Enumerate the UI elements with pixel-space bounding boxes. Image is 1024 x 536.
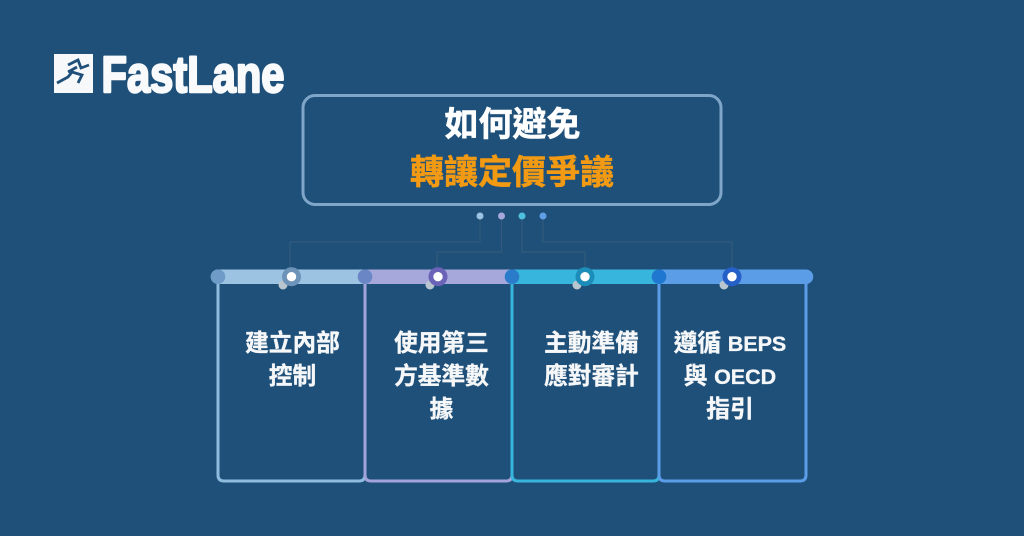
timeline bar bbox=[211, 270, 813, 284]
icon: running figure bbox=[54, 54, 93, 93]
logo: FastLane bbox=[54, 46, 284, 103]
card 2 text: 使用第三 bbox=[394, 330, 489, 357]
card 4 text: 指引 bbox=[706, 396, 754, 423]
marker 2 bbox=[426, 267, 448, 290]
card 2 text: 據 bbox=[430, 396, 454, 423]
marker 1 bbox=[278, 267, 301, 290]
panel: title box bbox=[303, 96, 721, 204]
card 4 text: 遵循 BEPS bbox=[674, 330, 786, 357]
card 4: 遵循 BEPS 與 OECD 指引 bbox=[659, 280, 806, 481]
card 1 text: 建立內部 bbox=[245, 330, 340, 357]
marker 4 bbox=[720, 267, 742, 290]
card 1: 建立內部控制 bbox=[218, 280, 365, 481]
card 3 text bbox=[544, 330, 639, 390]
card 1 text: 控制 bbox=[269, 363, 316, 390]
connectors from title box to bar bbox=[290, 216, 732, 270]
card 3: 主動準備應對審計 bbox=[512, 280, 659, 481]
title line 1: 如何避免 bbox=[444, 106, 580, 144]
card 4 text: 與 OECD bbox=[684, 363, 776, 390]
card 3 text: 主動準備 bbox=[544, 330, 639, 357]
top dots bbox=[476, 212, 546, 220]
card 2 text bbox=[394, 330, 489, 423]
logo wordmark: FastLane bbox=[102, 46, 284, 103]
card 1 text bbox=[245, 330, 340, 390]
marker 3 bbox=[572, 267, 594, 290]
bar joints bbox=[211, 269, 666, 284]
card 2: 使用第三方基準數據 bbox=[365, 280, 512, 481]
card 4 text bbox=[674, 330, 786, 423]
title line 2: 轉讓定價爭議 bbox=[410, 154, 614, 192]
card 3 text: 應對審計 bbox=[544, 362, 639, 390]
card 2 text: 方基準數 bbox=[394, 362, 489, 390]
